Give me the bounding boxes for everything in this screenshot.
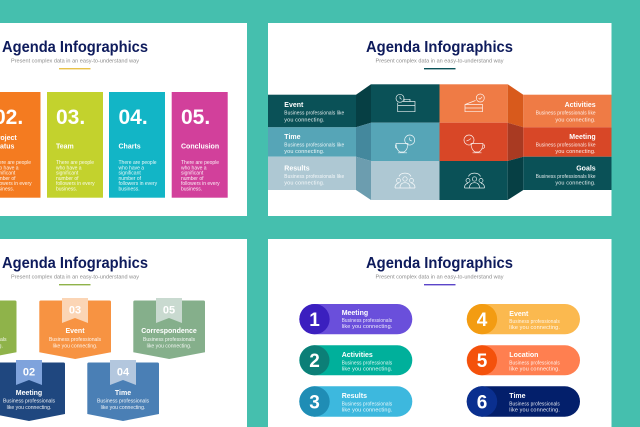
card 04 time: like you connecting. bbox=[101, 405, 145, 411]
centre block bbox=[371, 84, 508, 200]
label: activities: you connecting. bbox=[555, 117, 596, 123]
card 03 team: There are people bbox=[56, 160, 94, 166]
pill 1 meeting: Meeting bbox=[342, 310, 368, 317]
label: goals: Business professionals like bbox=[536, 174, 596, 180]
card 02 meeting: Meeting bbox=[16, 390, 42, 397]
pill 4 event: Business professionals bbox=[509, 319, 560, 325]
card 05 conclusion: business. bbox=[181, 186, 202, 192]
card 04 charts: There are people bbox=[118, 160, 157, 166]
icon: cake and check bbox=[465, 94, 484, 112]
card 04 charts: who have a bbox=[118, 165, 144, 171]
label: event: Business professionals like bbox=[284, 110, 344, 116]
label: results bbox=[284, 166, 344, 186]
card 04 charts: followers in every bbox=[118, 181, 158, 187]
pill 5 location bbox=[467, 345, 580, 375]
pill 4 event: like you connecting. bbox=[509, 325, 560, 331]
left bands bbox=[268, 84, 371, 200]
card 05 correspondence: Correspondence bbox=[141, 328, 197, 335]
pill 3 results: 3 bbox=[309, 392, 320, 413]
panel: bottom-right pills bbox=[268, 239, 612, 427]
pill 2 activities: Activities bbox=[342, 352, 373, 359]
label: meeting: Meeting bbox=[569, 134, 596, 141]
title: Agenda Infographics bbox=[366, 255, 513, 272]
pill 1 meeting: 1 bbox=[309, 310, 320, 331]
card 03 event bbox=[39, 298, 111, 359]
panel: bottom-left ribbon cards bbox=[0, 239, 247, 427]
card 05 correspondence: Business professionals bbox=[143, 337, 195, 343]
pill 2 activities bbox=[299, 345, 412, 375]
pill 1 meeting: like you connecting. bbox=[342, 324, 393, 330]
card 03 team: number of bbox=[56, 176, 79, 182]
pill 5 location: Business professionals bbox=[509, 360, 560, 366]
label: meeting: you connecting. bbox=[555, 149, 596, 155]
pill 4 event: 4 bbox=[477, 310, 488, 331]
pill 6 time bbox=[467, 386, 580, 417]
label: event: Event bbox=[284, 102, 304, 109]
card 04 charts: number of bbox=[118, 176, 142, 182]
label: time: Business professionals like bbox=[284, 142, 344, 148]
card 04 charts: 04. bbox=[118, 106, 148, 129]
card 03 team: significant bbox=[56, 170, 79, 176]
card 04 charts bbox=[109, 92, 165, 198]
card 03 event: like you connecting. bbox=[53, 344, 97, 350]
label: event: you connecting. bbox=[284, 117, 325, 123]
card 04 charts: business. bbox=[118, 186, 140, 192]
label: time bbox=[284, 134, 344, 155]
card 05 conclusion: significant bbox=[181, 170, 204, 176]
card 03 team: 03. bbox=[56, 106, 85, 129]
panel: top-right folded bands bbox=[268, 23, 612, 216]
title: Agenda Infographics bbox=[2, 255, 148, 272]
card 03 event: Business professionals bbox=[49, 337, 101, 343]
icon: team bbox=[395, 173, 415, 188]
card 05 conclusion: followers in every bbox=[181, 181, 220, 187]
card 04 time: Time bbox=[115, 390, 131, 397]
label: goals: you connecting. bbox=[555, 180, 596, 186]
subtitle: Present complex data in an easy-to-understand way bbox=[376, 274, 504, 280]
icon: clock and cup bbox=[464, 135, 484, 153]
title: Agenda Infographics bbox=[2, 39, 148, 56]
card 05 correspondence: 05 bbox=[163, 305, 175, 317]
label: event bbox=[284, 102, 344, 123]
pill 3 results: like you connecting. bbox=[342, 408, 393, 414]
pill 5 location: like you connecting. bbox=[509, 366, 560, 372]
label: meeting bbox=[536, 134, 596, 155]
label: activities bbox=[536, 102, 596, 123]
card 05 conclusion bbox=[172, 92, 228, 198]
pill 2 activities: 2 bbox=[309, 351, 320, 372]
card 02 meeting: Business professionals bbox=[3, 398, 55, 404]
card 01 green bbox=[0, 300, 16, 359]
label: meeting: Business professionals like bbox=[536, 142, 596, 148]
label: goals bbox=[536, 166, 596, 186]
card 04 charts: significant bbox=[118, 170, 141, 176]
card 05 conclusion: number of bbox=[181, 176, 204, 182]
card 05 conclusion: who have a bbox=[181, 165, 207, 171]
label: activities: Activities bbox=[565, 102, 596, 109]
card 04 charts: Charts bbox=[118, 144, 141, 150]
pill 6 time: 6 bbox=[477, 392, 487, 413]
card 05 conclusion: There are people bbox=[181, 160, 219, 166]
card 04 time: 04 bbox=[117, 366, 130, 378]
card 04 time bbox=[87, 360, 159, 421]
pill 6 time: like you connecting. bbox=[509, 408, 560, 414]
pill 1 meeting bbox=[299, 304, 412, 334]
pill 2 activities: Business professionals bbox=[342, 360, 392, 366]
label: activities: Business professionals like bbox=[536, 110, 596, 116]
title: Agenda Infographics bbox=[366, 39, 513, 56]
card 03 event: 03 bbox=[69, 305, 81, 317]
card 05 conclusion: 05. bbox=[181, 106, 210, 129]
pill 6 time: Business professionals bbox=[509, 402, 560, 408]
icon: team right bbox=[464, 173, 484, 188]
pill 1 meeting: Business professionals bbox=[342, 318, 392, 324]
card 03 team: Team bbox=[56, 144, 74, 150]
card 02 meeting: like you connecting. bbox=[7, 405, 51, 411]
card 02 meeting bbox=[0, 360, 65, 421]
card 03 team: who have a bbox=[56, 165, 82, 171]
pill 3 results: Results bbox=[342, 393, 367, 400]
label: goals: Goals bbox=[576, 166, 596, 172]
pill 3 results bbox=[299, 386, 412, 417]
label: results: Business professionals like bbox=[284, 174, 344, 180]
card 05 correspondence bbox=[133, 298, 205, 359]
pill 5 location: 5 bbox=[477, 351, 488, 372]
subtitle: Present complex data in an easy-to-understand way bbox=[11, 274, 139, 280]
label: time: you connecting. bbox=[284, 149, 325, 155]
card 05 conclusion: Conclusion bbox=[181, 144, 219, 150]
pill 5 location: Location bbox=[509, 352, 538, 359]
label: time: Time bbox=[284, 134, 301, 141]
card 03 team bbox=[47, 92, 103, 198]
panel: top-left numbered cards bbox=[0, 23, 247, 216]
subtitle: Present complex data in an easy-to-understand way bbox=[11, 58, 139, 64]
pill 3 results: Business professionals bbox=[342, 402, 392, 408]
card 03 event: Event bbox=[65, 328, 85, 335]
icon: briefcase and clock bbox=[396, 94, 415, 112]
pill 2 activities: like you connecting. bbox=[342, 366, 393, 372]
card 02 meeting: 02 bbox=[23, 366, 35, 378]
subtitle: Present complex data in an easy-to-understand way bbox=[376, 58, 504, 64]
right bands bbox=[508, 84, 612, 200]
card 03 team: followers in every bbox=[56, 181, 95, 187]
pill 4 event: Event bbox=[509, 311, 529, 318]
card 04 time: Business professionals bbox=[97, 398, 149, 404]
card 02 project status bbox=[0, 92, 40, 198]
label: results: you connecting. bbox=[284, 180, 325, 186]
pill 4 event bbox=[467, 304, 580, 334]
icon: cup and clock bbox=[396, 135, 415, 153]
card 03 team: business. bbox=[56, 186, 77, 192]
pill 6 time: Time bbox=[509, 393, 526, 400]
label: results: Results bbox=[284, 166, 310, 172]
card 05 correspondence: like you connecting. bbox=[147, 344, 191, 350]
